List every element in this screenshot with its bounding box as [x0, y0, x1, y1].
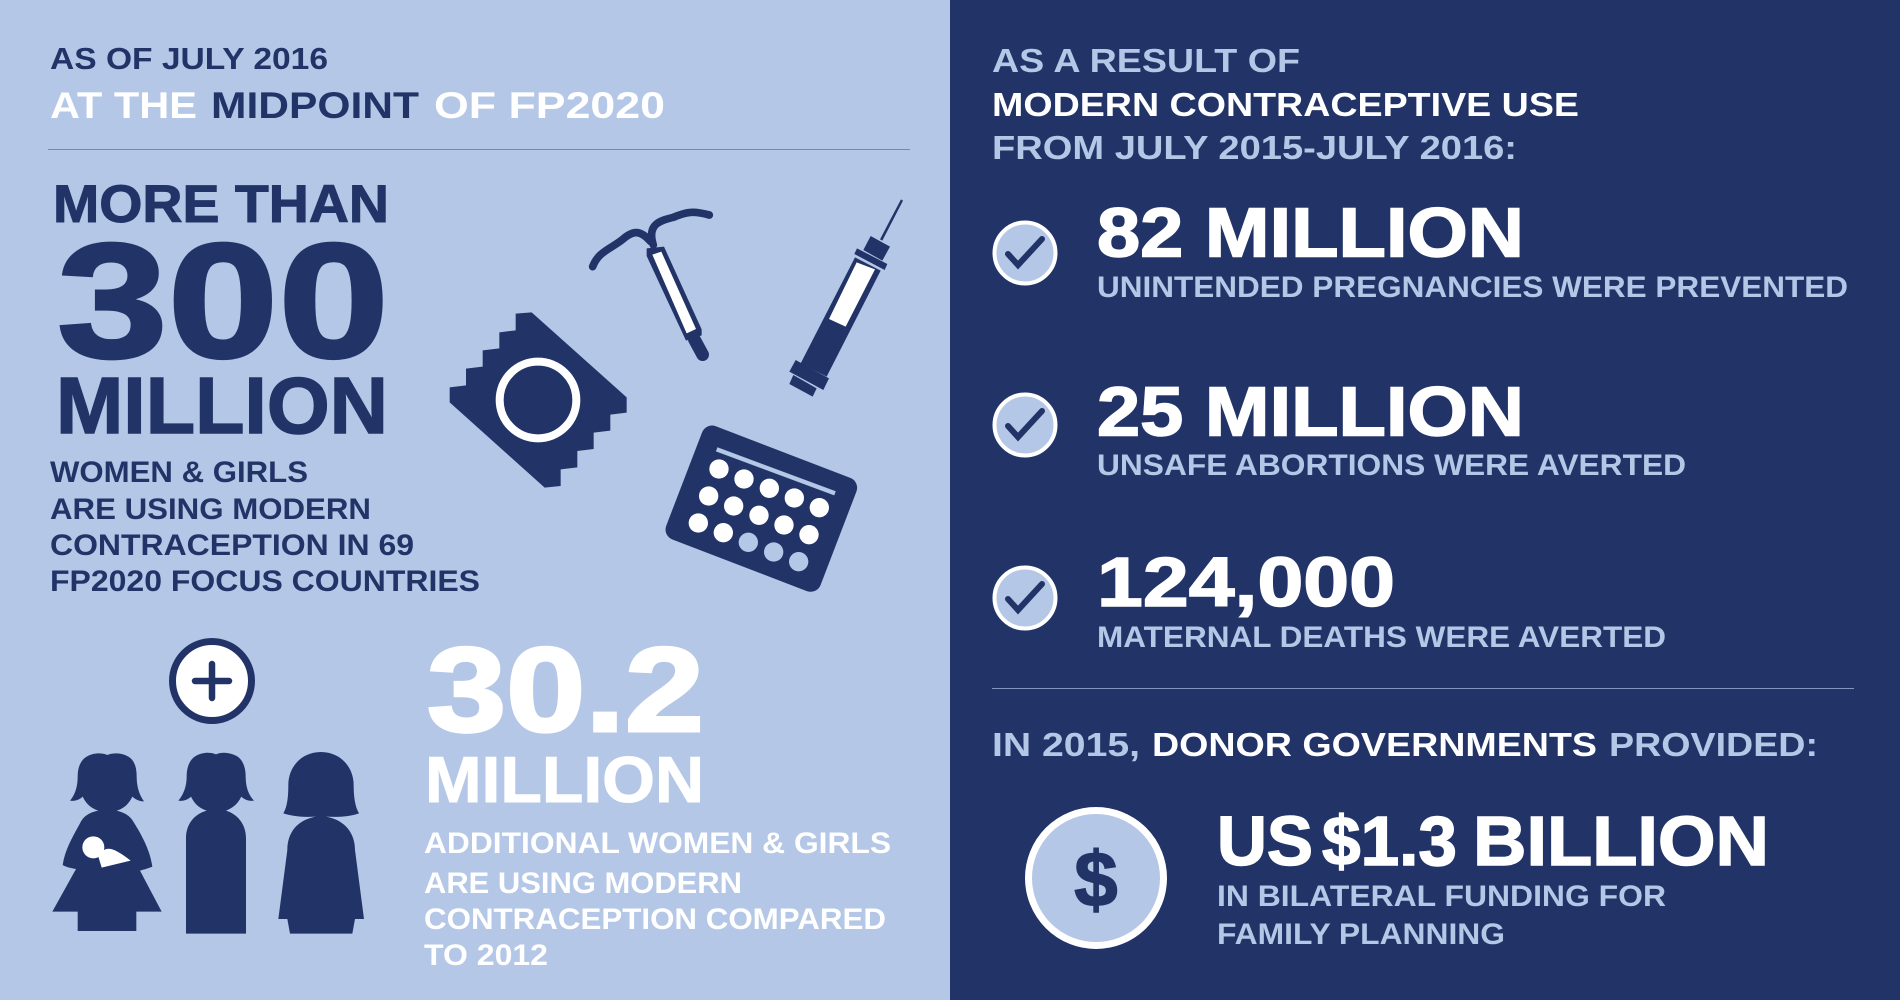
heading: as a result of modern contraceptive use: AS A RESULT OF [992, 42, 1300, 79]
text block: bilateral funding: IN BILATERAL FUNDING FOR [1217, 880, 1666, 913]
stat: 25 million [1097, 372, 1686, 482]
text block: women and girls using modern contraception: WOMEN & GIRLS [50, 456, 308, 489]
icon: woman [178, 753, 254, 934]
heading: as a result of modern contraceptive use [992, 42, 1579, 166]
text block: women and girls using modern contraception: ARE USING MODERN [50, 493, 371, 526]
icon: dollar coin: $ [1074, 835, 1118, 923]
heading: donor governments: IN 2015, [992, 726, 1140, 763]
icon: IUD [593, 212, 709, 355]
stat: more than 300 million: 300 [57, 209, 389, 392]
icon: check 1 [994, 222, 1056, 284]
stat: more than 300 million [53, 175, 389, 450]
text block: bilateral funding: FAMILY PLANNING [1217, 918, 1505, 951]
icon: girl [278, 752, 364, 934]
text block: women and girls using modern contraception: FP2020 FOCUS COUNTRIES [50, 565, 480, 598]
icon: condom packet [450, 312, 627, 488]
stat: 124,000: 124,000 [1097, 543, 1395, 621]
stat: 124,000 [1097, 543, 1666, 654]
stat: 124,000: MATERNAL DEATHS WERE AVERTED [1097, 621, 1666, 654]
icon: check 2 [994, 394, 1056, 456]
stat: US$1.3 billion: US [1217, 802, 1313, 880]
icon: pill pack [662, 422, 860, 595]
icon: dollar coin [1028, 810, 1164, 946]
heading: as of July 2016: OF FP2020 [434, 85, 665, 126]
stat: 30.2 million: MILLION [425, 743, 704, 816]
heading: as of July 2016 [50, 41, 665, 126]
heading: as of July 2016: AT THE [50, 85, 197, 126]
text block: additional women and girls: CONTRACEPTION COMPARED [424, 903, 886, 936]
icon: check 3 [994, 568, 1056, 628]
stat: 25 million: UNSAFE ABORTIONS WERE AVERTED [1097, 449, 1686, 482]
heading: as a result of modern contraceptive use: MODERN CONTRACEPTIVE USE [992, 86, 1579, 123]
heading: as a result of modern contraceptive use: FROM JULY 2015-JULY 2016: [992, 129, 1517, 166]
stat: 82 million [1097, 194, 1848, 304]
heading: donor governments [992, 726, 1818, 763]
panel: left current status [0, 0, 950, 1000]
stat: 30.2 million [425, 623, 704, 816]
stat: 82 million: UNINTENDED PREGNANCIES WERE PREVENTED [1097, 271, 1848, 304]
icon: plus circle [172, 642, 252, 720]
text block: women and girls using modern contraception: CONTRACEPTION IN 69 [50, 529, 414, 562]
panel: right results [950, 0, 1900, 1000]
text block: additional women and girls: TO 2012 [424, 939, 548, 972]
stat: 25 million: 25 MILLION [1097, 372, 1524, 450]
stat: US$1.3 billion: BILLION [1473, 802, 1769, 880]
stat: US$1.3 billion [1217, 802, 1769, 880]
stat: 30.2 million: 30.2 [427, 623, 704, 757]
text block: additional women and girls: ARE USING MODERN [424, 867, 742, 900]
text block: additional women and girls [424, 827, 891, 972]
heading: as of July 2016: MIDPOINT [211, 85, 419, 126]
heading: as of July 2016: AS OF JULY 2016 [50, 41, 328, 76]
text block: additional women and girls: ADDITIONAL WOMEN & GIRLS [424, 827, 891, 860]
heading: donor governments: DONOR GOVERNMENTS [1152, 726, 1597, 763]
stat: US$1.3 billion: $1.3 [1322, 802, 1457, 880]
stat: more than 300 million: MORE THAN [53, 175, 389, 234]
stat: 82 million: 82 MILLION [1097, 194, 1524, 272]
stat: more than 300 million: MILLION [56, 361, 388, 450]
text block: bilateral funding [1217, 880, 1666, 951]
icon: syringe [789, 199, 903, 397]
text block: women and girls using modern contraception [50, 456, 480, 598]
heading: donor governments: PROVIDED: [1609, 726, 1818, 763]
icon: woman holding baby [52, 753, 162, 931]
